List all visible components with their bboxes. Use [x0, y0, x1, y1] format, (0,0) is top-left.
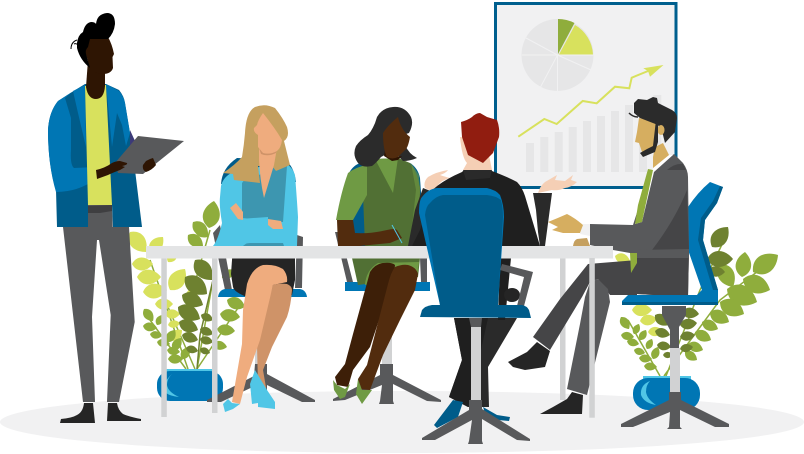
chair back and arms [348, 163, 421, 246]
bar chart [526, 95, 661, 172]
sweater [412, 171, 540, 246]
chair: bearded man seat [621, 290, 729, 429]
table legs: back [161, 256, 566, 417]
face [635, 118, 657, 152]
upper leg below table [498, 258, 511, 320]
trousers [449, 318, 517, 407]
hair [634, 97, 677, 143]
crossed lower leg [567, 279, 610, 395]
shoes [60, 403, 141, 423]
arm [337, 220, 402, 246]
green leaves [140, 199, 247, 364]
dark leaves [174, 255, 218, 369]
belt [88, 205, 113, 227]
person: standing man [48, 13, 184, 423]
presentation board [496, 4, 676, 188]
chin shadow [259, 148, 278, 155]
person: bearded man [508, 97, 723, 414]
person: man from behind [408, 113, 577, 428]
hands [96, 158, 156, 179]
plant: left [124, 199, 247, 369]
neck [259, 148, 277, 198]
jacket [48, 84, 142, 227]
hands [424, 170, 577, 193]
plant pot: right [633, 376, 700, 410]
person: woman in green [333, 107, 430, 404]
pie chart [522, 19, 594, 91]
shoes [508, 342, 583, 414]
head [85, 37, 114, 74]
yellow leaves [613, 251, 663, 337]
plant: right [613, 222, 783, 376]
dress [363, 158, 420, 246]
table top [146, 246, 613, 258]
seat [420, 305, 531, 318]
chair rear back [687, 182, 723, 305]
hair [77, 13, 115, 68]
face [383, 117, 410, 158]
back lower leg [533, 260, 637, 350]
sleeve [336, 165, 367, 220]
plant pot: left [157, 369, 223, 401]
shoes [434, 400, 510, 428]
skirt [352, 258, 420, 285]
chair: front centre [419, 188, 531, 444]
neck [460, 137, 492, 170]
back leg [335, 263, 395, 387]
front leg [358, 265, 418, 390]
face [254, 113, 282, 154]
hand [548, 214, 583, 233]
growth arrow [518, 65, 664, 137]
hair [223, 105, 290, 183]
green leaves [617, 247, 783, 371]
suit [590, 154, 689, 297]
backrest [419, 188, 504, 305]
dark leaves [652, 222, 734, 358]
stems [150, 230, 240, 369]
floor ellipse [0, 391, 804, 453]
chair back and arms [221, 158, 296, 184]
back leg [257, 284, 292, 399]
trousers [63, 227, 135, 402]
person: blonde woman [213, 105, 307, 412]
hair [461, 113, 499, 163]
folded arm [222, 217, 283, 246]
cuff [580, 224, 590, 236]
hair [354, 107, 417, 167]
chair base: left woman [207, 330, 315, 402]
waistcoat [242, 166, 287, 222]
ear [658, 125, 664, 135]
table leg: front right [589, 258, 595, 418]
gray chair arm [500, 264, 533, 306]
back shoe [250, 370, 275, 409]
chair base [469, 318, 482, 327]
skirt [231, 246, 295, 297]
neck [86, 60, 105, 99]
front leg [232, 265, 287, 404]
shirt [635, 155, 673, 224]
tie [630, 169, 653, 273]
front shoe [223, 399, 240, 412]
neck shadow [384, 150, 402, 161]
neck [653, 143, 669, 168]
blouse [213, 162, 298, 246]
tablet [130, 130, 135, 146]
beard [640, 120, 658, 157]
yellow leaves [124, 227, 202, 344]
t-shirt [85, 85, 112, 205]
chair base: middle woman [333, 335, 441, 404]
